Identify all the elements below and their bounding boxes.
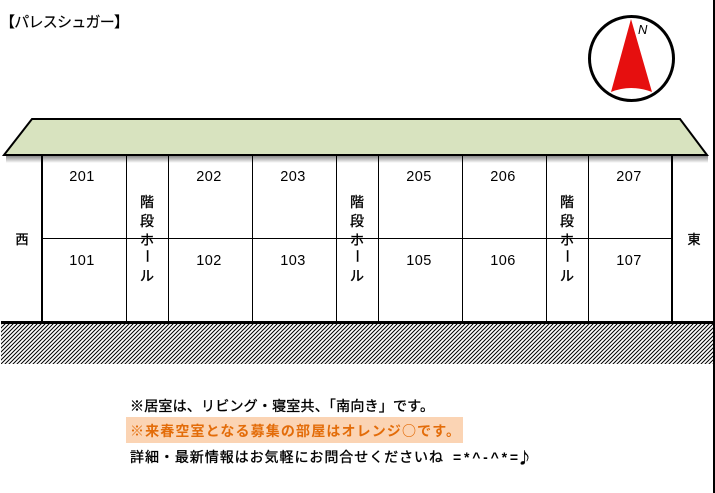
room numbers: 106 xyxy=(490,253,516,269)
room numbers: 202 xyxy=(196,169,222,185)
room numbers: 206 xyxy=(490,169,516,185)
east label: 東 xyxy=(687,229,701,248)
title: 【パレスシュガー】 xyxy=(0,11,129,32)
stair hall labels: ー xyxy=(137,249,157,263)
stair hall labels: 階 xyxy=(560,192,574,212)
stair hall labels: ル xyxy=(350,266,364,286)
ground line xyxy=(1,321,714,324)
room numbers: 201 xyxy=(69,169,95,185)
stair hall labels: ー xyxy=(557,249,577,263)
room numbers: 203 xyxy=(280,169,306,185)
note: contact: =*^-^*= xyxy=(453,449,518,465)
room numbers: 102 xyxy=(196,253,222,269)
note: orientation: ※居室は、リビング・寝室共、「南向き」です。 xyxy=(130,396,434,416)
roof xyxy=(4,119,707,155)
room numbers: 205 xyxy=(406,169,432,185)
room numbers: 103 xyxy=(280,253,306,269)
room numbers: 101 xyxy=(69,253,95,269)
room numbers: 107 xyxy=(616,253,642,269)
stair hall labels: 段 xyxy=(560,211,574,231)
icon: north compass xyxy=(590,16,674,100)
roof shadow xyxy=(6,156,708,163)
stair hall labels: 階 xyxy=(140,192,154,212)
stair hall labels: ー xyxy=(347,249,367,263)
stair hall labels: ル xyxy=(140,266,154,286)
stair hall labels: ホ xyxy=(140,230,154,250)
stair hall labels: 段 xyxy=(350,211,364,231)
stair hall labels: 段 xyxy=(140,211,154,231)
unit dividers xyxy=(42,156,672,322)
stair hall labels: ホ xyxy=(560,230,574,250)
building floor plan xyxy=(4,119,707,322)
stair hall labels: ル xyxy=(560,266,574,286)
stair hall labels: ホ xyxy=(350,230,364,250)
ground hatching xyxy=(1,324,713,364)
west label: 西 xyxy=(15,229,29,248)
note: orange rooms: ※来春空室となる募集の部屋はオレンジ○です。 xyxy=(130,421,460,441)
note: contact: ♪ xyxy=(517,447,532,468)
stair hall labels: 階 xyxy=(350,192,364,212)
note: contact: 詳細・最新情報はお気軽にお問合せくださいね xyxy=(130,447,443,467)
room numbers xyxy=(69,169,642,269)
highlight band xyxy=(126,417,463,443)
room numbers: 105 xyxy=(406,253,432,269)
room numbers: 207 xyxy=(616,169,642,185)
icon: north compass: N xyxy=(638,22,648,37)
page right border xyxy=(713,0,715,493)
stair hall labels xyxy=(137,192,577,286)
